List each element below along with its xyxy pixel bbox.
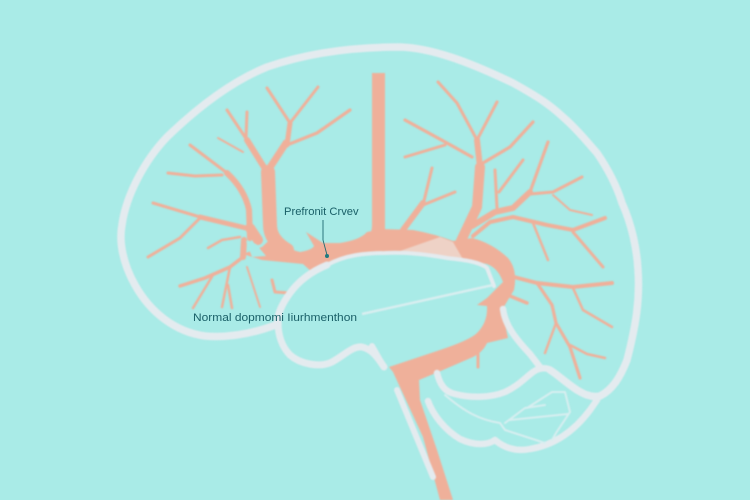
leader line with dot <box>323 220 329 258</box>
limbic structure outline <box>278 253 494 367</box>
limbic right curve <box>503 309 540 367</box>
label: Prefrontal: Prefronit Crvev <box>284 206 359 218</box>
right tree 3 <box>478 276 612 378</box>
left tree 3 <box>180 240 290 308</box>
hole in pathway <box>246 241 266 257</box>
brain outer outline <box>121 47 639 396</box>
cerebellum <box>428 368 597 450</box>
light overlap patch <box>400 237 464 261</box>
cerebellum upper lobe <box>437 368 553 397</box>
brain stem left edge <box>372 346 433 477</box>
left tree 1 <box>218 87 350 250</box>
label: Normal dopamine: Normal dopmomi Iiurhmenthon <box>193 312 357 324</box>
main band and arm <box>243 229 515 500</box>
right lower-band branches <box>403 168 455 230</box>
vertical trunk <box>360 73 385 245</box>
limbic dividing line <box>362 285 493 314</box>
dopamine pathways <box>148 73 612 500</box>
cerebellum folds <box>445 392 570 443</box>
right tree 1 <box>405 82 533 243</box>
cerebellum lower lobe <box>428 400 597 450</box>
left tree 2 <box>148 145 258 257</box>
brain illustration <box>121 47 639 500</box>
right tree 2 <box>472 142 605 267</box>
